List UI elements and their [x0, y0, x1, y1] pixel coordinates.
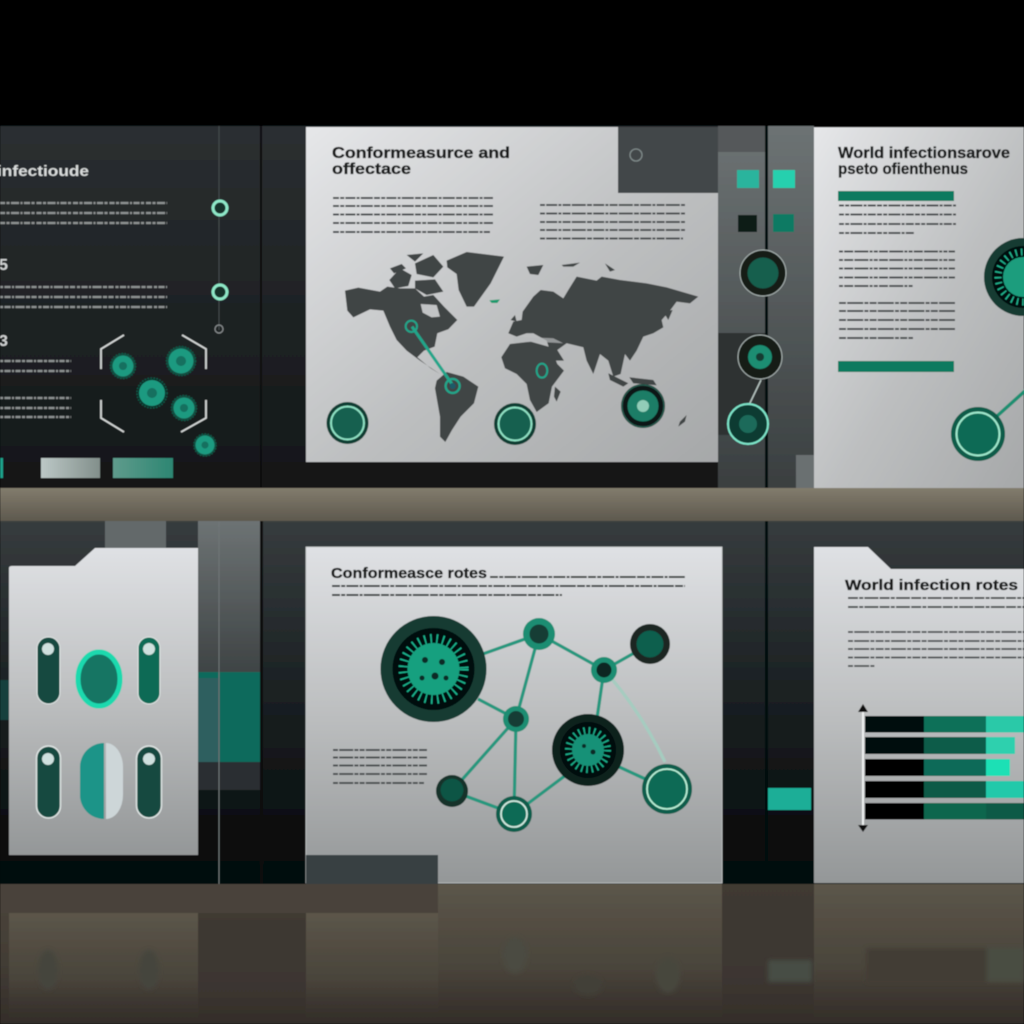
- green header bar: [838, 191, 954, 201]
- text block one: [839, 206, 956, 233]
- pill toggle three: [36, 746, 60, 818]
- panel: toggle legend (bottom left): [0, 521, 263, 884]
- swatch: black: [738, 215, 757, 232]
- half filled capsule: [80, 743, 123, 819]
- map heading: Conformeasurce and: [332, 145, 510, 162]
- legend swatches: [0, 458, 173, 478]
- map heading: [332, 145, 510, 178]
- map text left: [333, 198, 493, 232]
- panel 1 text block B: [0, 287, 167, 307]
- panel 1 timeline: [213, 126, 227, 333]
- swatch: green: [773, 214, 794, 232]
- network side text: [333, 750, 427, 783]
- oval highlight: [78, 652, 120, 706]
- text block two: [839, 252, 955, 286]
- notch glyph: [630, 149, 642, 161]
- panel 3 heading: World infectionsarove: [838, 145, 1010, 162]
- rates text block: [848, 632, 1024, 666]
- rates subtitle lines: [848, 598, 1024, 607]
- node lower right: [642, 764, 692, 814]
- rates heading: World infection rotes: [845, 577, 1018, 594]
- network heading: Conformeasce rotes: [331, 566, 487, 582]
- connector nodes: [728, 250, 786, 444]
- vertical divider between top panels: [765, 126, 768, 488]
- green footer bar: [838, 361, 954, 372]
- right strip background: [718, 126, 766, 488]
- top black margin: [0, 0, 1024, 126]
- green node with link: [951, 390, 1024, 461]
- australia node: [621, 384, 665, 428]
- virus cluster: [110, 346, 216, 456]
- network edges: [452, 634, 667, 814]
- floor reflection: [0, 884, 1024, 1024]
- node lower left: [436, 775, 468, 807]
- map card: [306, 127, 718, 462]
- green node left: [326, 402, 368, 444]
- node dark top right: [630, 624, 670, 664]
- panel: network of contamination (bottom centre): [263, 521, 766, 884]
- panel: world map (top centre): [260, 126, 718, 488]
- hexagon bracket: [101, 335, 206, 432]
- node centre: [503, 706, 529, 732]
- route: north america to south america: [406, 321, 547, 393]
- top right notch: [618, 127, 718, 193]
- green node middle: [494, 403, 536, 445]
- large virus node: [380, 616, 486, 722]
- node top: [523, 618, 555, 650]
- stacked bar chart: [858, 704, 1024, 832]
- corner block: [306, 855, 438, 884]
- virus node large: [984, 238, 1024, 316]
- medium virus node: [552, 714, 624, 786]
- panel: world infection prevalence (top right): [768, 126, 1024, 488]
- network intro text: [332, 577, 685, 595]
- pill toggle two: [138, 637, 160, 704]
- text block three: [839, 303, 955, 338]
- map heading: offectace: [332, 161, 411, 178]
- legend card: [9, 548, 198, 855]
- panel 1 text block C: [0, 361, 71, 417]
- node lower middle: [496, 796, 532, 832]
- rates card: [814, 547, 1024, 883]
- teal marker: [768, 788, 811, 810]
- map text right: [540, 205, 685, 238]
- taupe shelf band: [0, 488, 1024, 521]
- pill toggle one: [37, 637, 60, 704]
- panel: world infection rates (bottom right): [765, 521, 1024, 884]
- swatch: teal: [737, 170, 759, 188]
- panel 3 heading: pseto ofienthenus: [838, 161, 968, 178]
- network card: [306, 547, 722, 883]
- swatch: bright: [773, 170, 795, 188]
- panel 1 text block A: [0, 203, 167, 223]
- pill toggle four: [136, 746, 162, 818]
- node right: [591, 657, 617, 683]
- panel 3 heading: [838, 145, 1010, 178]
- panel: infection overview (top left): [0, 126, 260, 488]
- world map: [345, 252, 698, 442]
